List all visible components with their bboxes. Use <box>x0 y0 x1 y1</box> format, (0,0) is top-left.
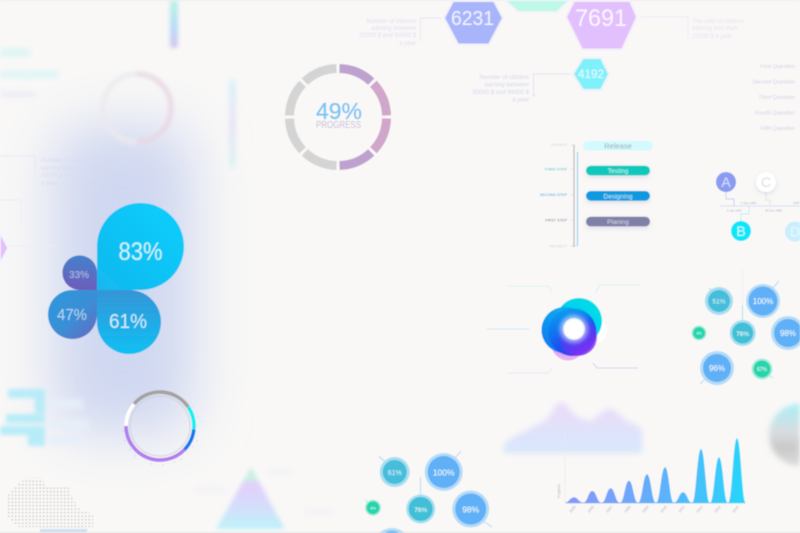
segmented ring <box>122 392 203 466</box>
callout text: 6231: a year <box>399 41 417 47</box>
hexagon: 6231 <box>444 1 503 44</box>
petal: 61% <box>97 290 161 354</box>
progress ring <box>280 59 396 175</box>
timeline labels: 30 Dec 1995 <box>765 208 782 212</box>
x axis labels: 2013 <box>714 505 722 514</box>
node: C: C <box>761 174 771 190</box>
petal: 83% <box>97 203 184 290</box>
petal: 83%: 83% <box>118 238 162 266</box>
blurred area chart <box>503 402 642 453</box>
x axis labels: 2011 <box>678 505 686 513</box>
x axis labels <box>569 505 740 514</box>
faint left callout: earning between <box>41 166 86 172</box>
petal: 47% <box>48 290 97 339</box>
x axis labels: 2008 <box>624 505 632 514</box>
callout text: 4192: a year <box>512 98 530 104</box>
question list: Second Question <box>752 80 795 86</box>
timeline connectors <box>720 192 800 221</box>
bubble: 96%: 96% <box>709 364 725 373</box>
x axis labels: 2010 <box>660 505 668 514</box>
y axis label: Progress <box>557 484 561 498</box>
hexagon: 4192: 4192 <box>578 67 604 81</box>
callout text: 7691 <box>640 17 744 40</box>
callout text: 6231: Number of citizens <box>366 19 416 25</box>
hexagon callouts <box>444 0 637 90</box>
question list: Fifth Question <box>760 126 795 132</box>
timeline labels <box>727 201 800 212</box>
blurred bar: top <box>170 0 178 48</box>
blurred pyramid labels <box>197 470 333 514</box>
bubble: 100%: 100% <box>433 468 455 478</box>
question list: First Question <box>760 64 795 70</box>
petal: 33%: 33% <box>69 269 89 281</box>
step labels: THIRD STEP <box>544 168 567 172</box>
question list: Third Question <box>758 95 795 101</box>
step labels <box>540 143 568 248</box>
blurred pale blocks <box>48 400 88 444</box>
hexagon: green <box>505 0 570 12</box>
node: B: B <box>736 223 746 239</box>
pill: planing: Planing <box>607 219 629 226</box>
bubble: 76%: 76% <box>414 507 427 514</box>
progress label: PROGRESS <box>316 120 361 131</box>
faint left callout: Number of citizens <box>41 158 91 164</box>
step labels: FIRST STEP <box>545 218 567 222</box>
bubbles: top right <box>692 268 800 385</box>
callout text: 7691: 25000 $ a year <box>691 34 733 40</box>
circle stack <box>542 298 607 360</box>
petal chart <box>48 203 184 354</box>
hexagon: left edge <box>0 233 8 263</box>
callout text: 6231: 25000 $ and 50000 $ <box>358 33 417 39</box>
pill: release: Release <box>604 141 632 150</box>
hexagon: 7691 <box>566 1 637 50</box>
blurred ring <box>103 74 171 142</box>
faint left callout: 25000 $ and 50000 $ <box>40 173 98 179</box>
bubble: 67%: 67% <box>757 367 768 373</box>
chart axis <box>564 432 566 503</box>
petal: 47%: 47% <box>57 307 87 324</box>
release chart <box>540 141 653 248</box>
x axis labels: 2005 <box>569 505 577 514</box>
blurred grey disc <box>769 404 800 466</box>
bubble: 76%: 76% <box>736 331 749 338</box>
circle connectors <box>487 285 640 373</box>
bubble: 98%: 98% <box>780 329 796 338</box>
faint left callout: a year <box>41 181 59 187</box>
x axis labels: 2007 <box>605 505 613 514</box>
timeline labels: 1997 <box>793 201 800 205</box>
x axis labels: 2009 <box>642 505 650 514</box>
callout text: 4192: 50000 $ and 99000 $ <box>472 90 530 96</box>
overlapping circles <box>487 285 640 373</box>
step labels: SECOND STEP <box>540 193 567 197</box>
blurred left bars <box>0 49 58 97</box>
question list: Fourth Question <box>755 110 795 116</box>
petal: 33% <box>62 255 97 290</box>
spikes <box>566 438 746 503</box>
petal: 61%: 61% <box>109 311 147 333</box>
step labels: LAUNCH <box>551 143 567 147</box>
bubble: cut off <box>379 528 405 533</box>
pill: designing: Designing <box>604 193 633 200</box>
bubble: green small: 4% <box>696 332 702 336</box>
spike area chart <box>557 432 746 514</box>
x axis labels: 2012 <box>696 505 704 514</box>
question list <box>752 64 795 132</box>
callout text: 7691: The ratio of citizens <box>692 19 744 25</box>
blurred pyramid <box>216 467 285 529</box>
faint left callout <box>0 156 98 246</box>
blurred periwinkle glow <box>52 125 194 435</box>
hexagon: 4192 <box>573 58 609 90</box>
bubble: 98%: 98% <box>462 504 480 514</box>
x axis labels: 2014 <box>732 505 740 514</box>
abcd timeline <box>716 172 800 242</box>
progress value: 49% <box>316 98 362 124</box>
callout text: 7691: earning less than <box>692 26 738 32</box>
callout text: 4192: Number of citizens <box>479 75 529 81</box>
dot cloud <box>7 478 93 532</box>
node: D: D <box>790 224 800 240</box>
blurred cyan blocks <box>0 389 45 446</box>
timeline labels: 5 Sep 1993 <box>741 201 757 205</box>
callout text: 4192: earning between <box>485 82 530 88</box>
bubble: 51%: 51% <box>712 298 726 306</box>
blurred bar: vertical <box>230 80 235 168</box>
callout text: 6231: earning between <box>372 26 417 32</box>
bubble: 100%: 100% <box>753 297 773 306</box>
step axis <box>571 145 578 247</box>
hexagon: 6231: 6231 <box>451 8 494 30</box>
timeline labels: 5 Jan 1991 <box>727 208 742 212</box>
pill: testing: Testing <box>608 168 629 175</box>
callout text: 6231 <box>358 18 441 47</box>
hexagon: 7691: 7691 <box>575 5 627 32</box>
bubbles: bottom <box>365 451 492 533</box>
bubble: green: 4% <box>370 506 376 510</box>
step labels: PROJECT <box>549 244 568 248</box>
callout text: 4192 <box>472 74 570 104</box>
x axis labels: 2006 <box>587 505 595 514</box>
node: A: A <box>721 174 731 190</box>
bubble: 61%: 61% <box>388 470 402 477</box>
